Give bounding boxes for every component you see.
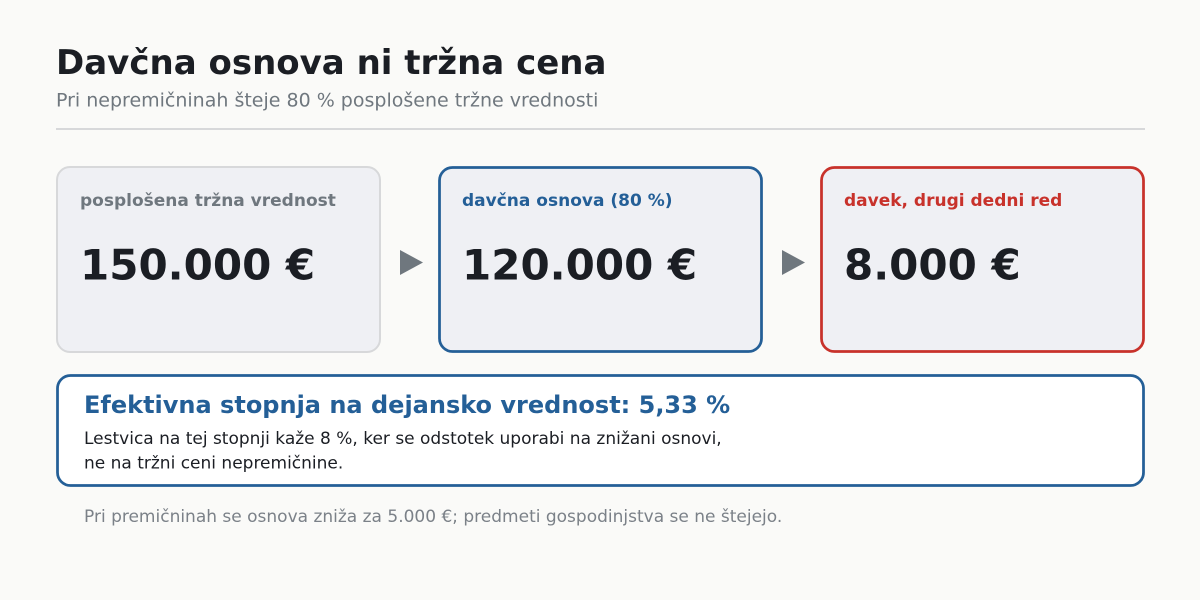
- callout body: Lestvica na tej stopnji kaže 8 %, ker se odstotek uporabi na znižani osnovi,: [84, 429, 722, 449]
- panel: tax: [822, 168, 1144, 352]
- value: tax: 8.000 €: [844, 240, 1021, 290]
- title: Davčna osnova ni tržna cena: [56, 43, 606, 83]
- callout heading: Efektivna stopnja na dejansko vrednost: 5,33 %: [84, 391, 730, 419]
- callout body: [84, 429, 722, 474]
- label: market value: posplošena tržna vrednost: [80, 191, 336, 211]
- value: market value: 150.000 €: [80, 240, 315, 290]
- callout body: ne na tržni ceni nepremičnine.: [84, 454, 343, 474]
- arrow: market value to tax base: [400, 250, 423, 275]
- label: tax base: davčna osnova (80 %): [462, 191, 672, 211]
- subtitle: Pri nepremičninah šteje 80 % posplošene tržne vrednosti: [56, 90, 598, 112]
- callout: effective rate: [58, 376, 1144, 486]
- value: tax base: 120.000 €: [462, 240, 697, 290]
- arrow: tax base to tax: [782, 250, 805, 275]
- footnote: Pri premičninah se osnova zniža za 5.000 €; predmeti gospodinjstva se ne štejejo.: [84, 507, 782, 527]
- panel: market value: [57, 167, 380, 352]
- label: tax: davek, drugi dedni red: [844, 191, 1062, 211]
- panel: tax base: [440, 168, 762, 352]
